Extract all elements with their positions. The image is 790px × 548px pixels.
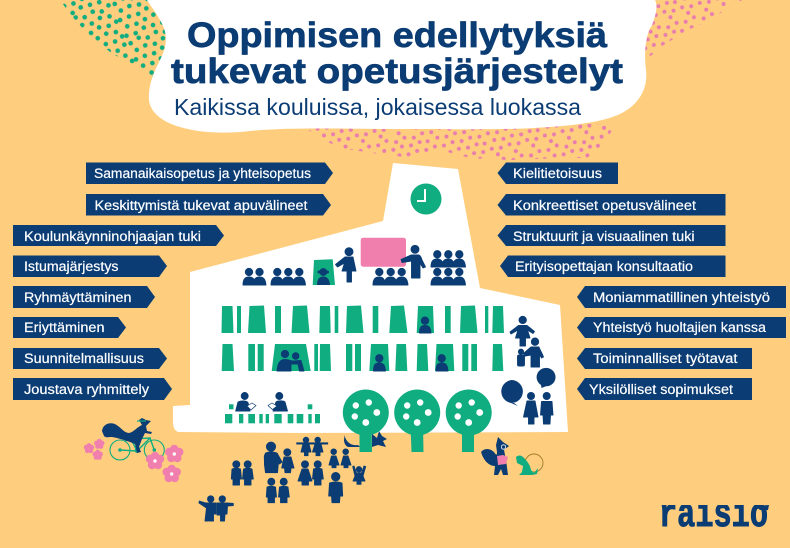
label: Erityisopettajan xyxy=(500,256,726,277)
two children pointing xyxy=(199,496,233,521)
label: Eriyttäminen: Eriyttäminen xyxy=(24,320,104,335)
left arrow labels xyxy=(13,162,333,400)
label: Konkreettiset xyxy=(498,194,726,216)
girl and boy xyxy=(298,461,323,485)
fox behind tree xyxy=(344,431,387,447)
label: Konkreettiset: Konkreettiset opetusvälineet xyxy=(513,198,696,213)
trees xyxy=(343,390,492,452)
label: Samanaikaisopetus xyxy=(86,162,333,184)
teacher right xyxy=(401,245,426,278)
label: Toiminnalliset xyxy=(577,348,752,369)
group of children and adults xyxy=(199,437,366,521)
label: Istumajärjestys: Istumajärjestys xyxy=(24,259,119,274)
reading students xyxy=(236,392,288,411)
label: Suunnitelmallisuus: Suunnitelmallisuus xyxy=(24,351,144,366)
label: Eriyttäminen xyxy=(13,317,126,338)
label: Moniammatillinen xyxy=(577,286,786,308)
teacher left xyxy=(336,248,356,282)
library shelves xyxy=(225,404,320,423)
right arrow labels xyxy=(498,162,786,400)
people in lower windows xyxy=(277,350,448,371)
tree 3 xyxy=(446,390,492,452)
green creature with ring xyxy=(516,454,543,475)
label: Ryhmäyttäminen xyxy=(13,286,155,308)
label: Keskittymistä: Keskittymistä tukevat apuvälineet xyxy=(94,198,308,213)
dot pattern: green xyxy=(60,0,172,77)
parents and child xyxy=(510,316,544,367)
two children lower xyxy=(266,478,289,503)
green door with student xyxy=(313,259,335,285)
label: Kielitietoisuus: Kielitietoisuus xyxy=(513,166,602,181)
title: tukevat opetusjärjestelyt xyxy=(171,52,623,91)
fox with pink heart xyxy=(481,437,509,475)
dot pattern: pink upper right xyxy=(640,0,742,60)
flower xyxy=(165,445,184,462)
dot pattern: pink lower xyxy=(300,124,616,160)
label: Samanaikaisopetus: Samanaikaisopetus ja yhteisopetus xyxy=(94,166,311,181)
small flower xyxy=(84,443,94,453)
label: Toiminnalliset: Toiminnalliset työtavat xyxy=(593,351,738,366)
girl with raised arms xyxy=(353,466,366,484)
flower xyxy=(146,452,164,469)
title xyxy=(171,16,623,91)
speech bubbles and two adults xyxy=(501,368,556,424)
label: Struktuurit: Struktuurit ja visuaalinen tuki xyxy=(513,229,694,244)
label: Joustava ryhmittely: Joustava ryhmittely xyxy=(24,382,149,397)
logo: raisio xyxy=(662,505,769,527)
label: Suunnitelmallisuus xyxy=(13,348,167,369)
label: Kielitietoisuus xyxy=(498,162,618,184)
title cloud xyxy=(147,0,656,133)
fox on bicycle xyxy=(102,418,164,460)
person in upper window xyxy=(420,317,431,333)
label: Erityisopettajan: Erityisopettajan konsultaatio xyxy=(515,259,693,274)
pink board xyxy=(361,238,406,267)
school building xyxy=(173,163,568,433)
flower xyxy=(162,465,181,482)
icon: clock xyxy=(410,184,442,214)
label: Joustava ryhmittely xyxy=(13,378,172,400)
subtitle: Kaikissa kouluissa, jokaisessa luokassa xyxy=(174,94,581,120)
small flower xyxy=(92,450,103,460)
students xyxy=(243,251,466,285)
label: Moniammatillinen: Moniammatillinen yhteistyö xyxy=(593,290,770,305)
adult xyxy=(329,472,343,503)
label: Yhteistyö: Yhteistyö huoltajien kanssa xyxy=(593,320,767,335)
label: Istumajärjestys xyxy=(13,256,167,277)
label: Struktuurit xyxy=(498,225,726,246)
label: Keskittymistä xyxy=(86,194,331,216)
tree 2 xyxy=(394,390,440,452)
label: Ryhmäyttäminen: Ryhmäyttäminen xyxy=(24,290,132,305)
label: Koulunkäynninohjaajan: Koulunkäynninohjaajan tuki xyxy=(24,229,201,244)
label: Yksilölliset: Yksilölliset sopimukset xyxy=(589,382,733,397)
pink flowers xyxy=(84,439,184,482)
two children xyxy=(231,461,253,485)
two children with arms out xyxy=(297,437,328,456)
label: Koulunkäynninohjaajan xyxy=(13,225,224,246)
classroom: top floor xyxy=(243,238,466,285)
title: Oppimisen edellytyksiä xyxy=(187,16,608,55)
label: Yhteistyö xyxy=(577,317,786,338)
windows: upper row xyxy=(222,306,504,333)
small flower xyxy=(94,439,104,449)
two girls xyxy=(329,449,351,468)
tree 1 xyxy=(343,390,389,452)
windows: lower row xyxy=(222,344,503,371)
adult and child xyxy=(264,442,294,473)
label: Yksilölliset xyxy=(577,378,752,400)
